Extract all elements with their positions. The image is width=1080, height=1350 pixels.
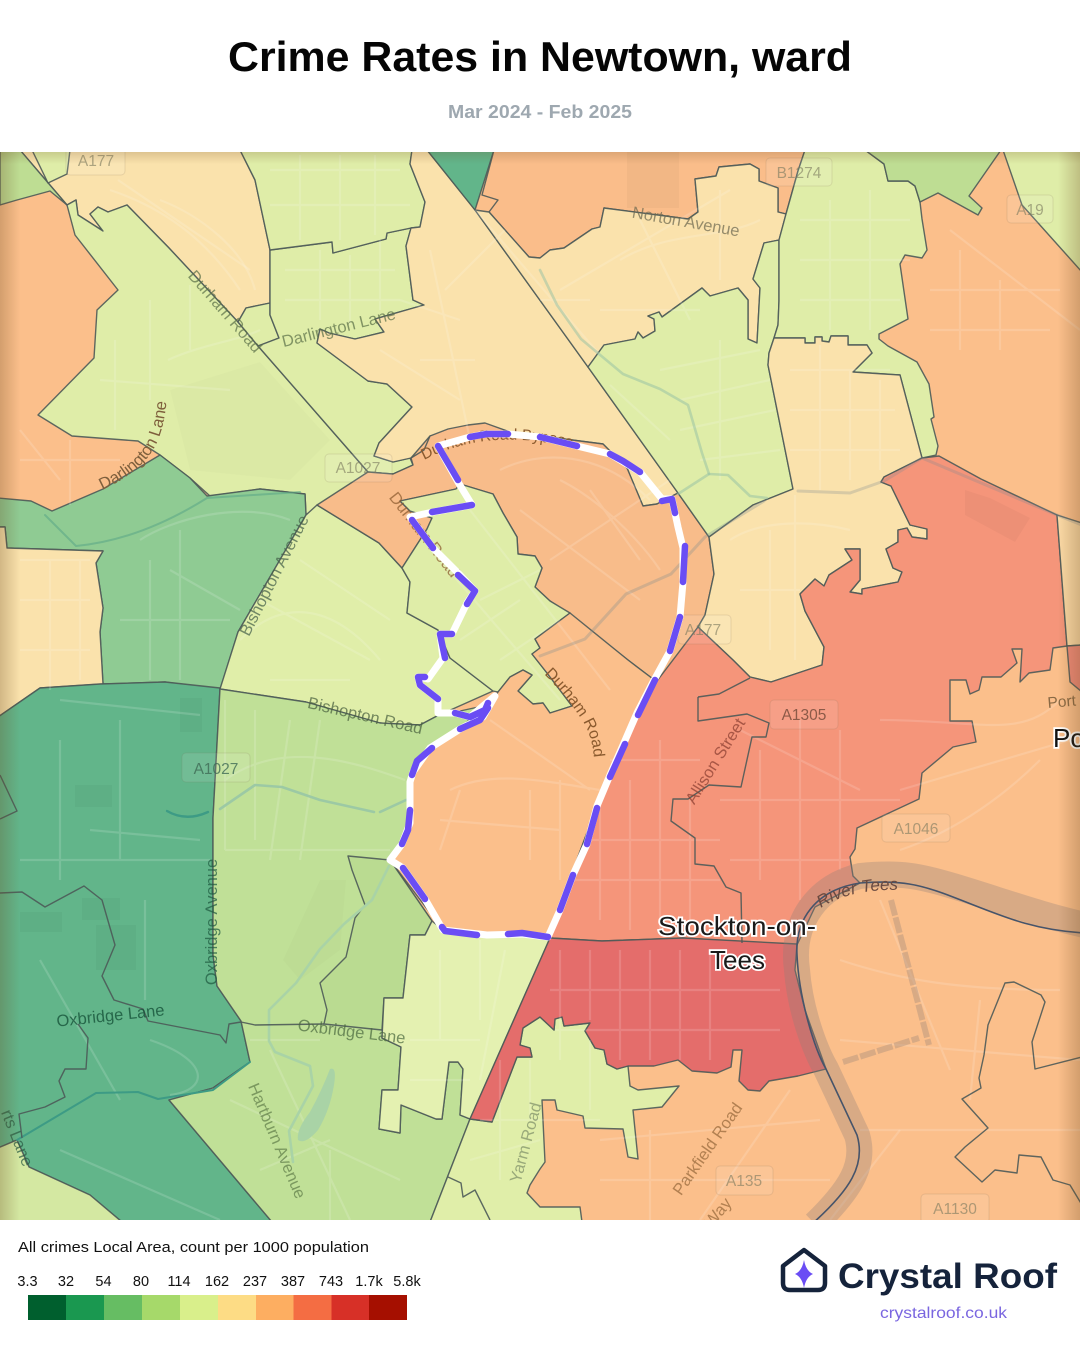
region: north orange through ward [317, 423, 714, 681]
bridge [843, 900, 929, 1062]
region: Darlington Lane small lime [238, 303, 279, 346]
place label: Stockton-on-Tees: Tees [710, 945, 765, 975]
label: Durham Road north: Durham Road [184, 267, 265, 356]
shield: A177 top-left [66, 146, 125, 175]
river centreline [797, 882, 1080, 1224]
shield: A1046: A1046 [894, 821, 938, 838]
legend values: 80 [133, 1274, 149, 1290]
region: east cream strip [1057, 515, 1080, 646]
region: top-left corner green [0, 150, 67, 205]
internal boundaries [0, 678, 1080, 1220]
region: dark green triangle [427, 150, 494, 210]
river band [796, 874, 1080, 1224]
legend values: 32 [58, 1274, 74, 1290]
wordmark: Crystal Roof [838, 1257, 1057, 1296]
shaded land parcels [20, 152, 1030, 970]
label: Hartburn Avenue: Hartburn Avenue [244, 1081, 309, 1201]
region: eastern lime beside beck [588, 240, 793, 537]
faint park shading [170, 362, 346, 980]
shield: A177 centre: A177 [685, 622, 721, 639]
legend values: 387 [281, 1274, 305, 1290]
legend values: 54 [95, 1274, 112, 1290]
region: north-east mid green [865, 150, 1001, 215]
label: River Tees: River Tees [817, 879, 898, 908]
legend values: 5.8k [393, 1274, 421, 1290]
region: west cream [0, 527, 103, 717]
shield: A177 top-left: A177 [78, 153, 114, 170]
label: Oxbridge Avenue: Oxbridge Avenue [203, 859, 221, 985]
icon: house with star [783, 1250, 825, 1290]
region: Bishopton lime [220, 505, 493, 725]
region: Oxbridge darker green parcel [320, 856, 432, 1030]
region: south middle lime [430, 1017, 679, 1222]
region: top small lime [32, 150, 70, 183]
shield: A1027 west: A1027 [194, 761, 238, 778]
shield: A1046 [882, 814, 950, 842]
region: top-left cream [20, 150, 270, 322]
region: south-west dark green [0, 682, 272, 1222]
label: Darlington Lane west: Darlington Lane [98, 402, 166, 490]
region: top orange [482, 150, 805, 258]
website: crystalroof.co.uk [880, 1305, 1008, 1322]
label: Bishopton Avenue: Bishopton Avenue [236, 513, 313, 639]
region: Oxbridge mid green [169, 689, 483, 1222]
shield: A1305: A1305 [782, 707, 826, 724]
label: Way: Way [701, 1194, 736, 1231]
region: north-east corner lime [1003, 150, 1080, 272]
legend values: 114 [167, 1274, 191, 1290]
region: ward south orange [390, 613, 653, 937]
legend title: All crimes Local Area, count per 1000 population [18, 1240, 369, 1256]
region: Norton cream [475, 164, 786, 367]
label: Oxbridge Lane east: Oxbridge Lane [297, 1017, 406, 1048]
shield: A1027 west [182, 753, 250, 782]
waterways [17, 270, 1080, 1162]
region: bottom-left lime [0, 1140, 122, 1222]
shield: A19 [1007, 195, 1053, 223]
shield: B1274: B1274 [777, 165, 822, 182]
white boundary [390, 434, 683, 937]
legend values [17, 1274, 421, 1290]
shield: B1274 [766, 158, 832, 186]
shield: A135 [716, 1166, 773, 1195]
subtitle: date range: Mar 2024 - Feb 2025 [448, 102, 632, 122]
street network [20, 155, 1080, 1220]
label: Oxbridge Lane west: Oxbridge Lane [56, 1001, 165, 1031]
ward outline: Newtown [390, 434, 685, 937]
region: Roseworth cream [698, 336, 927, 682]
purple dashes [402, 434, 685, 937]
label: Bishopton Road: Bishopton Road [306, 694, 424, 738]
region: Newtown centre lime [400, 484, 572, 713]
shield: A1130 [921, 1194, 989, 1223]
shield: A135: A135 [726, 1173, 762, 1190]
region: Darlington Lane lime [258, 228, 424, 474]
label: Parkfield Road: Parkfield Road [669, 1100, 746, 1199]
place label: Stockton-on-Tees [658, 911, 816, 975]
region: top centre lime [240, 150, 425, 253]
legend colour bar [28, 1295, 407, 1320]
map edge shading [0, 152, 1080, 1220]
label: Darlington Lane east: Darlington Lane [280, 305, 397, 351]
pond [298, 1069, 335, 1141]
label: Durham Road south: Durham Road [545, 667, 606, 757]
legend values: 1.7k [355, 1274, 383, 1290]
logo: Crystal Roof [783, 1250, 1057, 1322]
region: central north cream [317, 150, 678, 506]
label: Port: Port [1047, 693, 1077, 712]
region: south lime strip [379, 921, 550, 1133]
legend values: 162 [205, 1274, 229, 1290]
label: Norton Avenue: Norton Avenue [631, 204, 741, 240]
region: south town red [470, 938, 826, 1122]
region: west green [0, 455, 306, 690]
legend [17, 1240, 421, 1320]
region: north-east lime [774, 150, 938, 458]
label: Allison Street: Allison Street [682, 715, 749, 807]
label: Durham Road ward west: Durham Road [385, 489, 463, 581]
shield: A1130: A1130 [933, 1201, 977, 1218]
shield: A19: A19 [1016, 202, 1044, 219]
region: north-west lime [38, 200, 368, 515]
region: far-east salmon corner [1067, 645, 1080, 692]
legend values: 743 [319, 1274, 343, 1290]
region: town centre salmon [548, 456, 1067, 945]
title: Crime Rates in Newtown, ward [228, 33, 852, 80]
label: Yarm Road: Yarm Road [507, 1101, 546, 1185]
place label: Stockton-on-Tees: Stockton-on- [658, 911, 816, 941]
legend values: 3.3 [17, 1274, 38, 1290]
shield: A1305 [770, 700, 838, 729]
shield: A1027 north: A1027 [336, 460, 380, 477]
label: Durham Road Bypass: Durham Road Bypass [420, 428, 572, 460]
shield: A1027 north [325, 454, 392, 482]
legend values: 237 [243, 1274, 267, 1290]
shield: A177 centre [678, 615, 731, 644]
